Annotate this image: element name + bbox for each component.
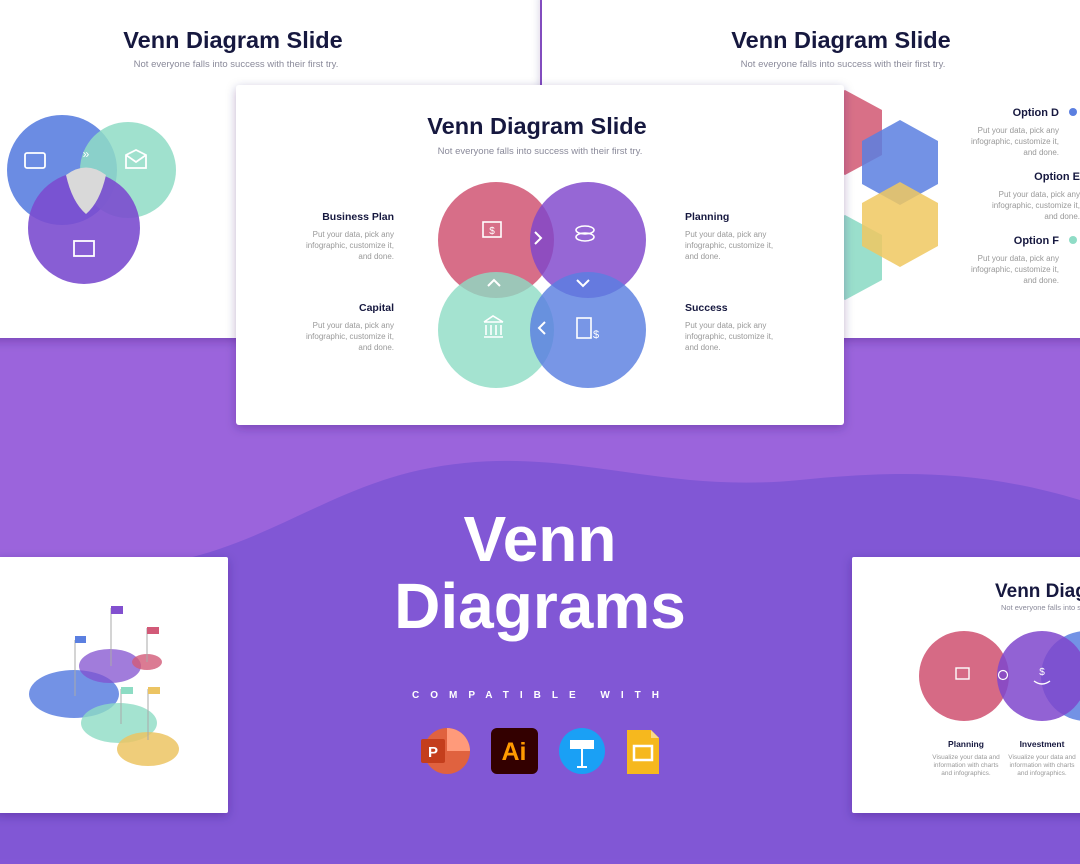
labels right: Put your data, pick any <box>685 230 766 239</box>
labels left <box>306 211 394 352</box>
labels left: Capital <box>359 302 394 314</box>
options text <box>971 107 1080 285</box>
app icons <box>421 728 659 774</box>
title: top-left slide: Venn Diagram Slide <box>123 27 343 53</box>
labels left: Put your data, pick any <box>313 321 394 330</box>
four-circle venn: $ <box>593 329 599 341</box>
four-circle venn <box>438 182 646 388</box>
captions: information with charts <box>1009 762 1075 769</box>
ellipses with flags <box>29 606 179 766</box>
title: center slide: Venn Diagram Slide <box>427 113 647 139</box>
main heading <box>394 503 686 642</box>
three-circle venn <box>7 115 176 284</box>
labels left: Business Plan <box>322 211 394 223</box>
captions: Planning <box>948 739 984 749</box>
options text: Option E <box>1034 171 1080 183</box>
options text: and done. <box>1023 276 1059 285</box>
options text: Put your data, pick any <box>999 190 1080 199</box>
options text: infographic, customize it, <box>992 201 1080 210</box>
labels right <box>685 211 773 352</box>
options text: infographic, customize it, <box>971 137 1059 146</box>
compatible with: COMPATIBLE WITH <box>412 690 670 701</box>
slide: top-right <box>542 0 1080 338</box>
slide: top-left <box>0 0 540 338</box>
labels right: Put your data, pick any <box>685 321 766 330</box>
labels right: infographic, customize it, <box>685 241 773 250</box>
icon: powerpoint: P <box>428 744 438 761</box>
two-circle venn: $ <box>1039 667 1045 678</box>
captions <box>932 739 1076 777</box>
main heading: Venn <box>464 503 616 575</box>
options text: Put your data, pick any <box>978 126 1059 135</box>
title: top-right slide: Venn Diagram Slide <box>731 27 951 53</box>
captions: and infographics. <box>941 770 991 777</box>
captions: Investment <box>1020 739 1065 749</box>
options text: infographic, customize it, <box>971 265 1059 274</box>
icon: illustrator <box>491 728 538 774</box>
subtitle: top-left slide: Not everyone falls into success with their first try. <box>134 59 338 70</box>
options text: Put your data, pick any <box>978 254 1059 263</box>
slide: bottom-right <box>852 557 1080 813</box>
two-circle venn <box>919 631 1080 721</box>
options text: Option D <box>1013 107 1059 119</box>
captions: Visualize your data and <box>1008 754 1076 761</box>
subtitle: top-right slide: Not everyone falls into success with their first try. <box>741 59 945 70</box>
hexagons <box>808 90 938 300</box>
labels left: and done. <box>358 252 394 261</box>
labels left: and done. <box>358 343 394 352</box>
icon: powerpoint <box>421 728 470 774</box>
slide: center <box>236 85 844 425</box>
captions: information with charts <box>933 762 999 769</box>
icon: keynote <box>559 728 605 774</box>
labels right: and done. <box>685 343 721 352</box>
slide: bottom-left <box>0 557 228 813</box>
captions: Visualize your data and <box>932 754 1000 761</box>
main heading: Diagrams <box>394 570 686 642</box>
options text: and done. <box>1044 212 1080 221</box>
options text: and done. <box>1023 148 1059 157</box>
labels left: Put your data, pick any <box>313 230 394 239</box>
three-circle venn: » <box>83 147 90 161</box>
labels right: infographic, customize it, <box>685 332 773 341</box>
icon: illustrator: Ai <box>502 738 526 766</box>
four-circle venn: $ <box>489 226 495 237</box>
labels left: infographic, customize it, <box>306 332 394 341</box>
labels right: and done. <box>685 252 721 261</box>
labels left: infographic, customize it, <box>306 241 394 250</box>
labels right: Success <box>685 302 728 314</box>
options text: Option F <box>1014 235 1059 247</box>
subtitle: center slide: Not everyone falls into success with their first try. <box>438 146 642 157</box>
icon: google slides <box>627 730 659 774</box>
labels right: Planning <box>685 211 729 223</box>
captions: and infographics. <box>1017 770 1067 777</box>
